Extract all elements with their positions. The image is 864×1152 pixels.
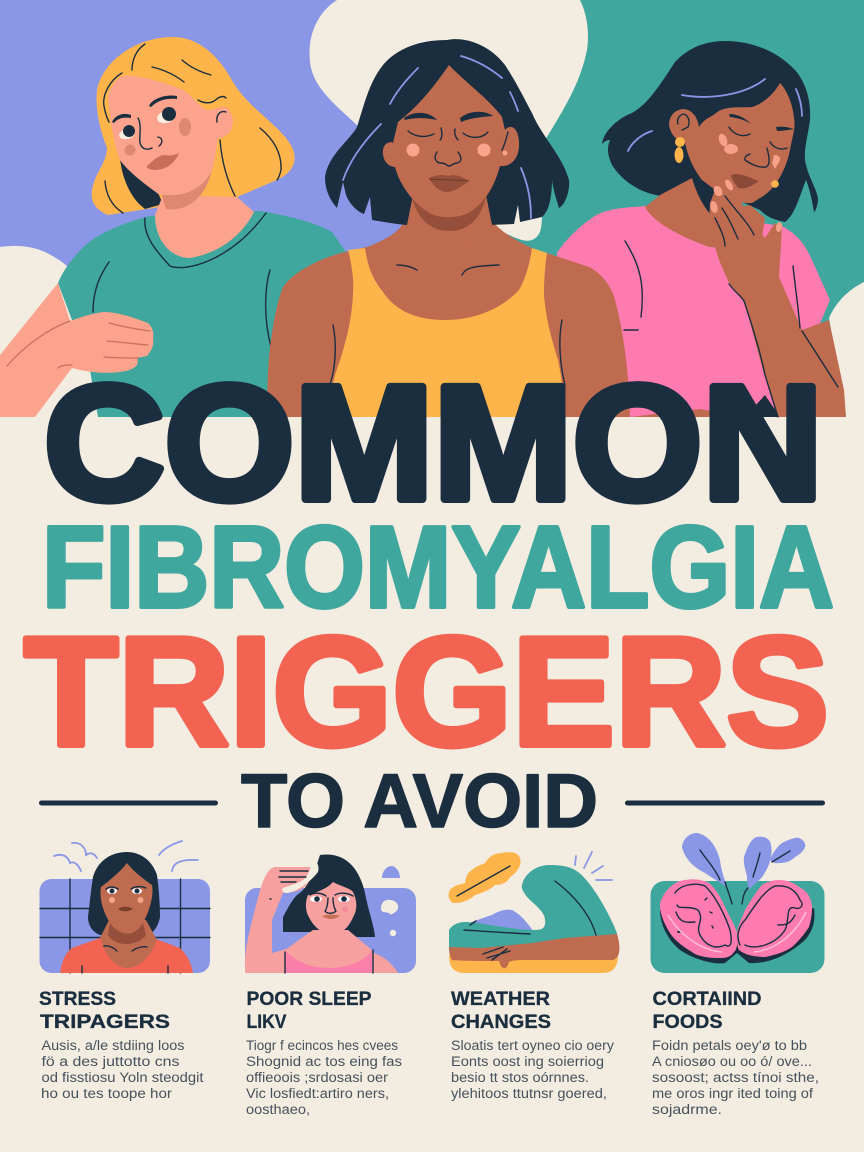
heading: certain foods: FOODS	[652, 1011, 722, 1033]
person: central woman with closed eyes	[267, 39, 630, 417]
body text: stress triggers: Ausis, a/le stdiing loos	[42, 1038, 185, 1053]
heading: certain foods	[652, 988, 762, 1033]
body text: poor sleep: Vic losfiedt:artiro ners,	[246, 1086, 389, 1101]
title: TRIGGERS: TRIGGERS	[24, 605, 829, 778]
title: COMMON: COMMON	[44, 351, 823, 534]
hero background	[0, 0, 864, 417]
icon: sliced food on teal plate	[650, 833, 824, 973]
body text: stress triggers	[41, 1038, 204, 1101]
body text: poor sleep	[246, 1038, 402, 1117]
subtitle: TO AVOID: TO AVOID	[241, 759, 598, 844]
heading: certain foods: CORTAIIND	[652, 988, 762, 1010]
panel: poor sleep	[245, 854, 416, 1117]
icon: weather wave and arm	[449, 852, 619, 973]
body text: weather changes	[451, 1038, 614, 1101]
body text: certain foods	[652, 1038, 819, 1117]
panel: weather changes	[449, 852, 619, 1101]
body text: weather changes: besio tt stos oórnnes.	[451, 1070, 589, 1085]
main title	[24, 351, 834, 844]
body text: certain foods: me oros ingr ited toing of	[652, 1086, 813, 1101]
body text: stress triggers: ho ou tes toope hor	[41, 1086, 173, 1101]
body text: certain foods: Foidn petals oey'ø to bb	[652, 1038, 807, 1053]
heading: stress triggers	[39, 988, 170, 1033]
body text: weather changes: Eonts oost ing soierriog	[451, 1054, 604, 1069]
person: pink shirt woman	[557, 41, 846, 417]
panel: certain foods	[650, 833, 824, 1117]
heading: stress triggers: TRIPAGERS	[40, 1011, 170, 1033]
person: blonde woman	[0, 37, 346, 417]
body text: poor sleep: oosthaeo,	[246, 1102, 310, 1117]
heading: weather changes	[451, 988, 551, 1033]
body text: weather changes: ylehitoos ttutnsr goered,	[451, 1086, 607, 1101]
hero illustration	[0, 0, 864, 417]
heading: weather changes: CHANGES	[451, 1011, 551, 1033]
body text: weather changes: Sloatis tert oyneo cio oery	[451, 1038, 614, 1053]
body text: certain foods: A cniosøo ou oo ó/ ove...	[652, 1054, 812, 1069]
heading: weather changes: WEATHER	[451, 988, 550, 1010]
icon: stressed woman	[40, 841, 210, 973]
body text: certain foods: sojadrme.	[652, 1102, 722, 1117]
heading: stress triggers: STRESS	[39, 988, 116, 1010]
heading: poor sleep: LIKV	[246, 1011, 286, 1033]
body text: poor sleep: Shognid ac tos eing fas	[246, 1054, 402, 1069]
body text: stress triggers: od fisstiosu Yoln steodgit	[42, 1070, 204, 1085]
icon: tired woman with raised arm	[245, 854, 416, 973]
heading: poor sleep	[246, 988, 372, 1033]
body text: poor sleep: Tiogr f ecincos hes cvees	[246, 1038, 398, 1053]
heading: poor sleep: POOR SLEEP	[246, 988, 372, 1010]
body text: certain foods: sosoost; actss tínoi sthe,	[652, 1070, 819, 1085]
body text: stress triggers: fö a des juttotto cns	[42, 1054, 180, 1069]
body text: poor sleep: offieoois ;srdosasi oer	[246, 1070, 389, 1085]
panel: stress triggers	[39, 841, 210, 1101]
